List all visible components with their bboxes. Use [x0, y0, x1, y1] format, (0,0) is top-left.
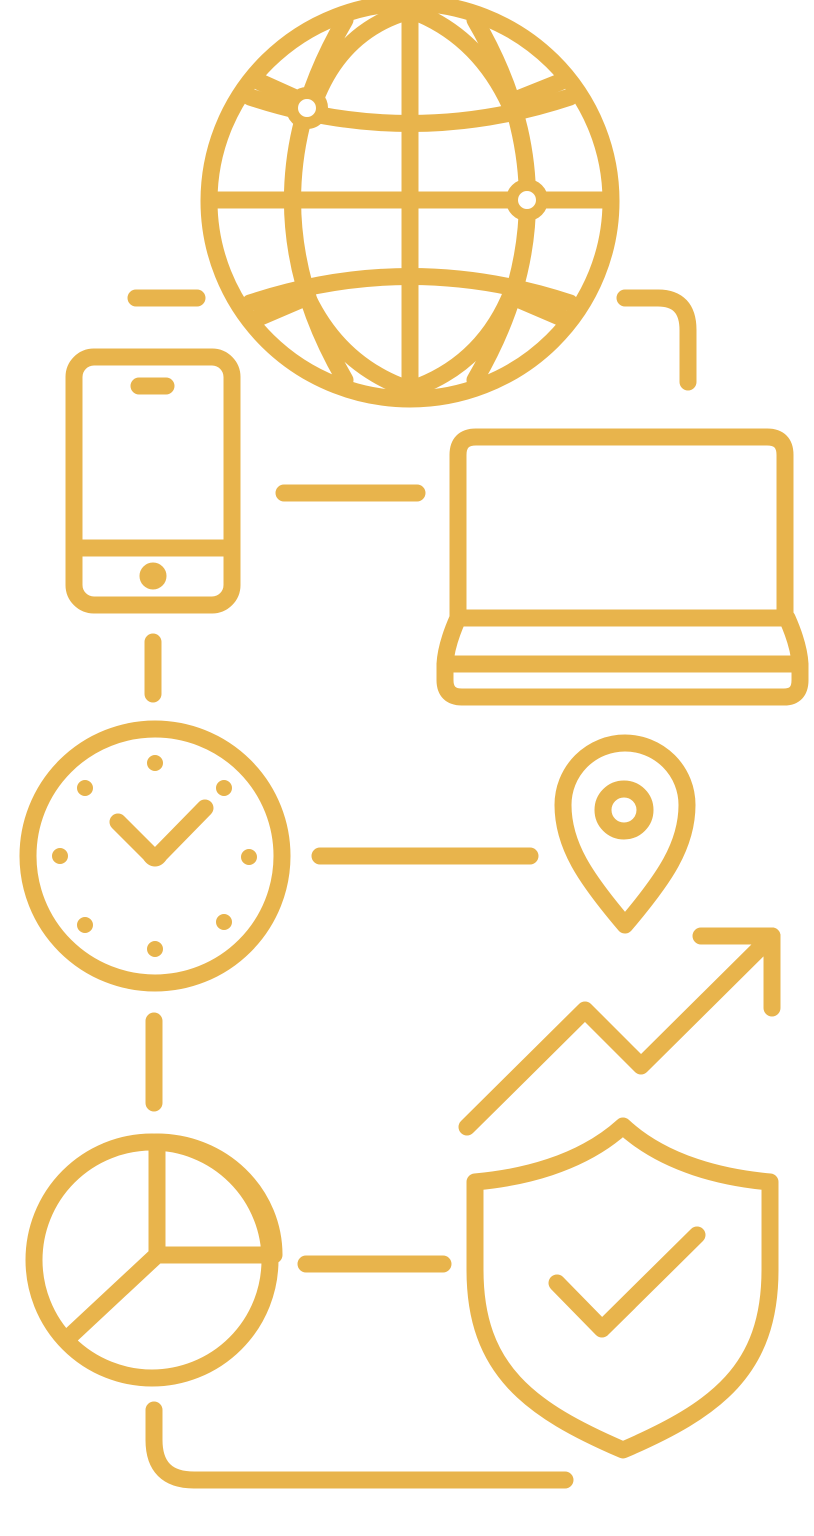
connector: globe left — [136, 290, 197, 306]
icon: location pin — [563, 743, 687, 925]
connector: phone to clock — [144, 642, 162, 694]
icon: shield with check — [475, 1126, 770, 1450]
icon: globe — [209, 3, 611, 399]
connector: globe right — [625, 298, 688, 382]
icon: laptop — [445, 437, 800, 697]
connector: clock to pin — [320, 848, 530, 864]
icon: trend arrow — [467, 936, 772, 1127]
connector: pie to shield — [306, 1256, 443, 1272]
icon: clock — [28, 729, 282, 983]
icon: smartphone — [74, 357, 232, 605]
icon: pie chart — [34, 1142, 274, 1378]
connector: clock to pie — [146, 1021, 162, 1103]
connector: bottom — [154, 1410, 565, 1480]
connector: phone to laptop — [284, 484, 417, 502]
